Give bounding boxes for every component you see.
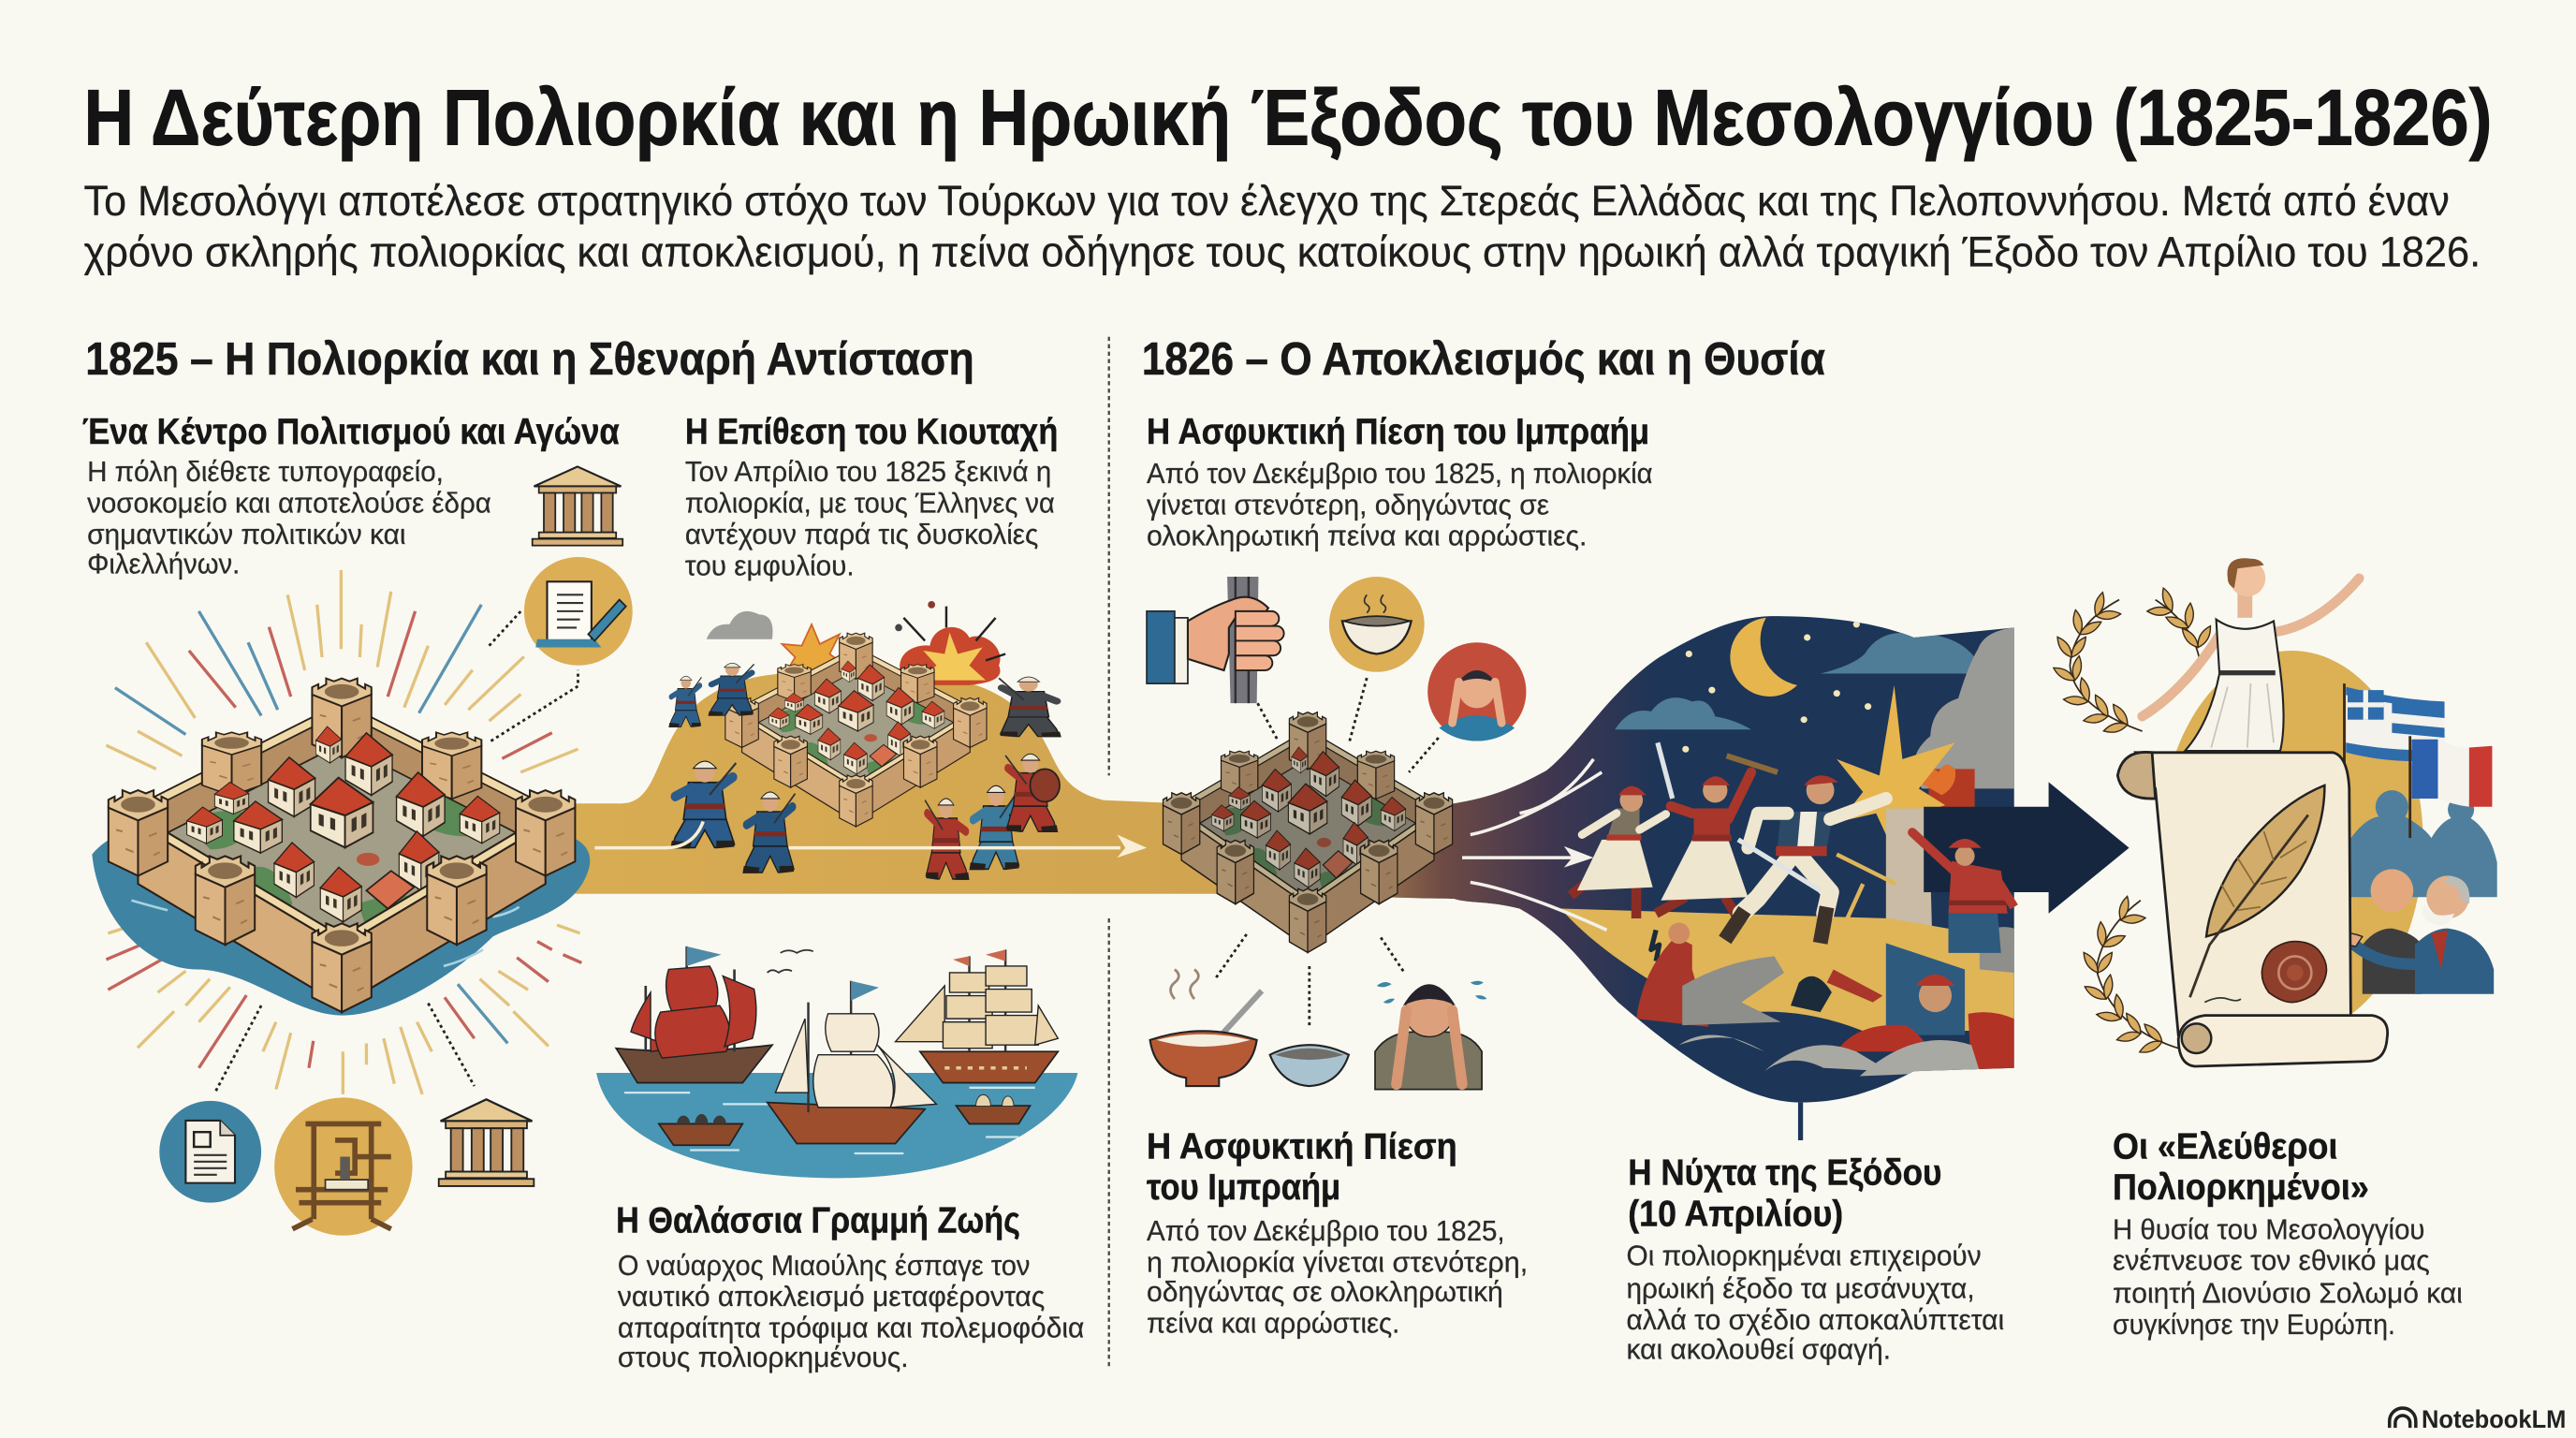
text block: Kioutahi attack: αντέχουν παρά τις δυσκολίες	[685, 518, 1038, 550]
ship: red sails	[616, 946, 772, 1083]
logo: NotebookLM: NotebookLM	[2422, 1404, 2566, 1433]
figure three	[1725, 775, 1886, 943]
text block: Ibrahim pressure bottom	[1147, 1126, 1528, 1339]
text block: Kioutahi attack: πολιορκία, με τους Έλληνες να	[685, 487, 1055, 520]
text block: Ibrahim pressure top: Από τον Δεκέμβριο του 1825, η πολιορκία	[1147, 457, 1653, 490]
flag: France	[2410, 736, 2492, 838]
text block: sea lifeline: ναυτικό αποκλεισμό μεταφέροντας	[618, 1280, 1045, 1313]
bodies and rubble	[1636, 936, 1708, 1027]
text block: night of the exodus: αλλά το σχέδιο αποκαλύπτεται	[1627, 1303, 2004, 1336]
text block: free besieged: Η θυσία του Μεσολογγίου	[2113, 1212, 2424, 1245]
explosion small	[782, 624, 842, 682]
icon: distressed person in red circle	[1427, 642, 1526, 741]
text block: sea lifeline	[616, 1200, 1084, 1373]
text block: Ibrahim pressure bottom: οδηγώντας σε ολοκληρωτική	[1147, 1275, 1503, 1308]
illustration: night of the exodus	[1454, 616, 2014, 1140]
section heading: 1825: 1825 – Η Πολιορκία και η Σθεναρή Αντίσταση	[85, 334, 974, 385]
text block: centre of culture: νοσοκομείο και αποτελούσε έδρα	[87, 487, 491, 520]
illustration: fortress of Messolonghi on water	[92, 679, 590, 1016]
text block: centre of culture	[82, 412, 620, 580]
icon: fist gripping rope	[1147, 577, 1284, 703]
text block: sea lifeline: Ο ναύαρχος Μιαούλης έσπαγε τον	[618, 1249, 1030, 1282]
silhouettes	[2351, 790, 2497, 897]
text block: Ibrahim pressure top: ολοκληρωτική πείνα και αρρώστιες.	[1147, 520, 1587, 552]
icon: soup bowl in gold circle	[1329, 577, 1425, 672]
flag: Greece	[2344, 683, 2445, 788]
boats	[659, 1094, 1030, 1145]
text block: Ibrahim pressure bottom: του Ιμπραήμ	[1147, 1167, 1340, 1208]
icon: temple bottom	[439, 1099, 534, 1186]
intro text: Το Μεσολόγγι αποτέλεσε στρατηγικό στόχο των Τούρκων για τον έλεγχο της Στερεάς Ελλάδας και της Πελοποννήσου. Μετά από έναν	[84, 177, 2450, 225]
intro text	[84, 177, 2481, 275]
text block: centre of culture: Ένα Κέντρο Πολιτισμού και Αγώνα	[82, 412, 620, 452]
arrow: toward the legacy	[1924, 782, 2130, 914]
road arrow	[594, 822, 1147, 858]
icon: printing press	[274, 1097, 413, 1236]
text block: free besieged: ενέπνευσε τον εθνικό μας	[2113, 1244, 2430, 1277]
icon: person holding head	[1375, 981, 1486, 1090]
quill	[2206, 785, 2324, 936]
text block: night of the exodus: (10 Απριλίου)	[1628, 1194, 1843, 1234]
section heading: 1826: 1826 – Ο Αποκλεισμός και η Θυσία	[1142, 334, 1825, 385]
text block: night of the exodus: Η Νύχτα της Εξόδου	[1628, 1152, 1942, 1193]
dotted connectors around fortress	[215, 611, 578, 1092]
stem	[1798, 1103, 1803, 1140]
soldiers	[668, 663, 1061, 880]
scroll	[2117, 752, 2388, 1066]
dotted connectors around second fortress	[1215, 678, 1439, 1029]
text block: Kioutahi attack: Τον Απρίλιο του 1825 ξεκινά η	[685, 455, 1051, 488]
text block: sea lifeline: απαραίτητα τρόφιμα και πολεμοφόδια	[618, 1312, 1084, 1344]
text block: free besieged	[2113, 1126, 2463, 1341]
path: road from fortress to the exodus	[575, 672, 1660, 1003]
Liberty figure	[2143, 558, 2359, 751]
text block: centre of culture: σημαντικών πολιτικών και	[87, 518, 406, 550]
text block: Ibrahim pressure bottom: Από τον Δεκέμβριο του 1825,	[1147, 1214, 1505, 1247]
wax seal	[2261, 942, 2326, 1003]
text block: Ibrahim pressure bottom: η πολιορκία γίνεται στενότερη,	[1147, 1245, 1528, 1278]
icon: red bowl with spoon	[1150, 969, 1262, 1086]
icon: temple top	[533, 466, 622, 546]
text block: night of the exodus: ηρωική έξοδο τα μεσάνυχτα,	[1627, 1271, 1975, 1304]
ship: tan sails	[896, 949, 1058, 1083]
moon	[1730, 618, 1797, 697]
men	[2326, 869, 2494, 994]
text block: Ibrahim pressure bottom: πείνα και αρρώστιες.	[1147, 1306, 1399, 1339]
text block: Ibrahim pressure top	[1147, 412, 1653, 552]
text block: Ibrahim pressure bottom: Η Ασφυκτική Πίεση	[1147, 1126, 1457, 1167]
icon: empty blue bowl	[1270, 1045, 1349, 1086]
text block: sea lifeline: στους πολιορκημένους.	[618, 1341, 909, 1373]
text block: Kioutahi attack: του εμφυλίου.	[685, 549, 855, 581]
text block: free besieged: συγκίνησε την Ευρώπη.	[2113, 1308, 2395, 1341]
text block: Kioutahi attack: Η Επίθεση του Κιουταχή	[685, 412, 1058, 452]
text block: free besieged: ποιητή Διονύσιο Σολωμό και	[2113, 1277, 2463, 1310]
text block: centre of culture: Η πόλη διέθετε τυπογραφείο,	[87, 455, 444, 488]
illustration: enemy defender	[1912, 832, 2014, 953]
figure one	[1571, 742, 1673, 918]
illustration: besieged fortress, damaged	[1163, 712, 1453, 952]
wreath	[2052, 587, 2214, 1056]
figure two	[1656, 756, 1778, 918]
text block: night of the exodus	[1627, 1152, 2004, 1365]
text block: centre of culture: Φιλελλήνων.	[87, 548, 240, 580]
stream arrows	[1462, 759, 1606, 930]
illustration: attack on the fortress	[668, 601, 1061, 880]
text block: free besieged: Οι «Ελεύθεροι	[2113, 1126, 2337, 1167]
icon: document and quill	[524, 557, 633, 666]
icon: newspaper in blue circle	[159, 1101, 261, 1203]
illustration: ships and sea	[596, 946, 1077, 1178]
text block: night of the exodus: και ακολουθεί σφαγή.	[1627, 1332, 1891, 1365]
text block: sea lifeline: Η Θαλάσσια Γραμμή Ζωής	[616, 1200, 1020, 1240]
intro text: χρόνο σκληρής πολιορκίας και αποκλεισμού, η πείνα οδήγησε τους κατοίκους στην ηρωική αλλά τραγική Έξοδο τον Απρίλιο του 1826.	[84, 227, 2481, 275]
ground	[1560, 909, 2014, 1035]
text block: Kioutahi attack	[685, 412, 1058, 581]
explosion large	[895, 601, 1005, 685]
illustration: radiating rays	[106, 570, 581, 1094]
text block: Ibrahim pressure top: Η Ασφυκτική Πίεση του Ιμπραήμ	[1147, 412, 1649, 452]
text block: Ibrahim pressure top: γίνεται στενότερη, οδηγώντας σε	[1147, 488, 1549, 521]
illustration: legacy	[2052, 558, 2497, 1066]
text block: night of the exodus: Οι πολιορκημέναι επιχειρούν	[1627, 1239, 1982, 1271]
text block: free besieged: Πολιορκημένοι»	[2113, 1167, 2369, 1208]
ship: white sails	[768, 981, 936, 1143]
